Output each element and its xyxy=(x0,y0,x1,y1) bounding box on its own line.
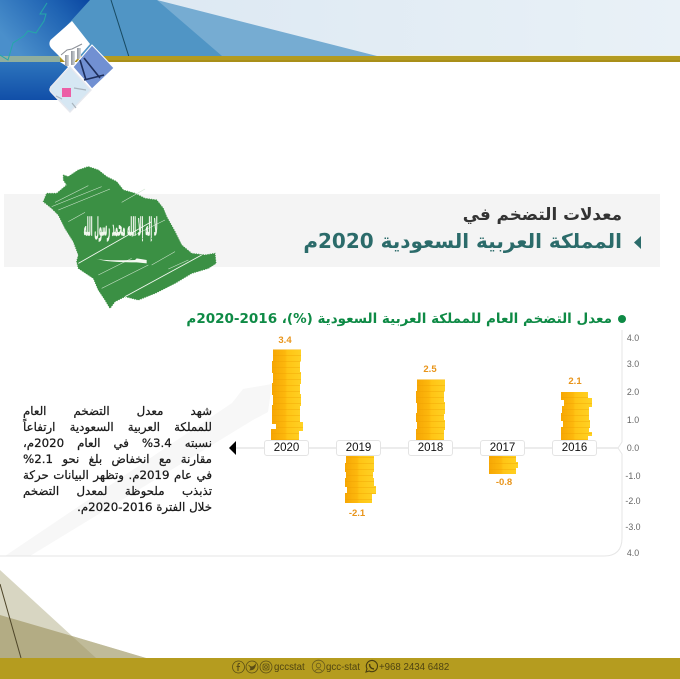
axis tick 4.0: 4.0 xyxy=(627,333,639,343)
axis tick 3.0: 3.0 xyxy=(627,359,639,369)
icon: pale photo diamond xyxy=(50,67,91,112)
handle gccstat: gccstat xyxy=(274,662,305,673)
coins 2018 xyxy=(416,380,445,440)
background arrow xyxy=(0,380,280,560)
coins 2020 xyxy=(271,350,303,440)
footer bar xyxy=(0,658,680,679)
year 2017 xyxy=(480,440,525,456)
body text: في عام 2019م. وتظهر البيانات حركة xyxy=(23,468,212,482)
year 2016 xyxy=(552,440,597,456)
axis tick 0.0: 0.0 xyxy=(627,443,639,453)
map of Saudi Arabia with flag xyxy=(42,166,216,308)
title line 2: المملكة العربية السعودية 2020م xyxy=(303,229,622,253)
body text: مقارنة مع انخفاض بلغ نحو 2.1% xyxy=(23,452,212,466)
year 2020: 2020 xyxy=(274,442,299,454)
chart subtitle: معدل التضخم العام للمملكة العربية السعودية (%)، 2016-2020م xyxy=(186,311,612,327)
title banner background xyxy=(4,194,660,267)
value 2016: 2.1 xyxy=(568,376,582,387)
flag sword xyxy=(95,258,147,263)
axis tick -1.0: -1.0 xyxy=(625,471,641,481)
value 2019: -2.1 xyxy=(349,508,365,519)
social icons xyxy=(232,660,272,674)
year 2018 xyxy=(408,440,453,456)
body text xyxy=(22,404,212,514)
chart frame and zero line xyxy=(0,330,622,556)
subtitle bullet xyxy=(618,315,626,323)
icon: whatsapp xyxy=(365,660,378,673)
axis tick -2.0: -2.0 xyxy=(625,496,641,506)
icon: blue photo diamond xyxy=(73,45,114,89)
axis tick 2.0: 2.0 xyxy=(627,387,639,397)
year 2016: 2016 xyxy=(562,442,587,454)
year 2017: 2017 xyxy=(490,442,515,454)
phone number: +968 2434 6482 xyxy=(379,662,449,673)
coins 2016 xyxy=(561,392,592,440)
body text: للمملكة العربية السعودية ارتفاعاً xyxy=(23,420,212,434)
icon: at sign xyxy=(312,660,326,674)
year 2020 xyxy=(264,440,309,456)
header banner xyxy=(0,0,680,113)
axis tick -3.0: -3.0 xyxy=(625,522,641,532)
flag inscription: لا إله إلا الله محمد رسول الله xyxy=(84,214,158,243)
coins 2017 xyxy=(489,456,518,474)
coins 2019 xyxy=(345,456,376,503)
year 2018: 2018 xyxy=(418,442,443,454)
axis tick 1.0: 1.0 xyxy=(627,415,639,425)
body text: شهد معدل التضخم العام xyxy=(23,404,212,418)
value 2018: 2.5 xyxy=(423,364,437,375)
year 2019 xyxy=(336,440,381,456)
footer triangles xyxy=(0,570,146,658)
axis arrowhead xyxy=(229,441,236,455)
body text: خلال الفترة 2016-2020م. xyxy=(77,500,212,514)
icon: white diamond with bar chart xyxy=(49,21,90,67)
coin bars xyxy=(271,350,592,503)
value 2017: -0.8 xyxy=(496,477,512,488)
axis tick bottom 4.0: 4.0 xyxy=(627,548,639,558)
year 2019: 2019 xyxy=(346,442,371,454)
body text: نسبته 3.4% في العام 2020م، xyxy=(23,436,212,450)
body text: تذبذب ملحوظة لمعدل التضخم xyxy=(23,484,212,498)
title line 1: معدلات التضخم في xyxy=(463,204,622,224)
title marker xyxy=(634,236,641,249)
handle gcc-stat: gcc-stat xyxy=(326,662,360,673)
value 2020: 3.4 xyxy=(278,335,292,346)
